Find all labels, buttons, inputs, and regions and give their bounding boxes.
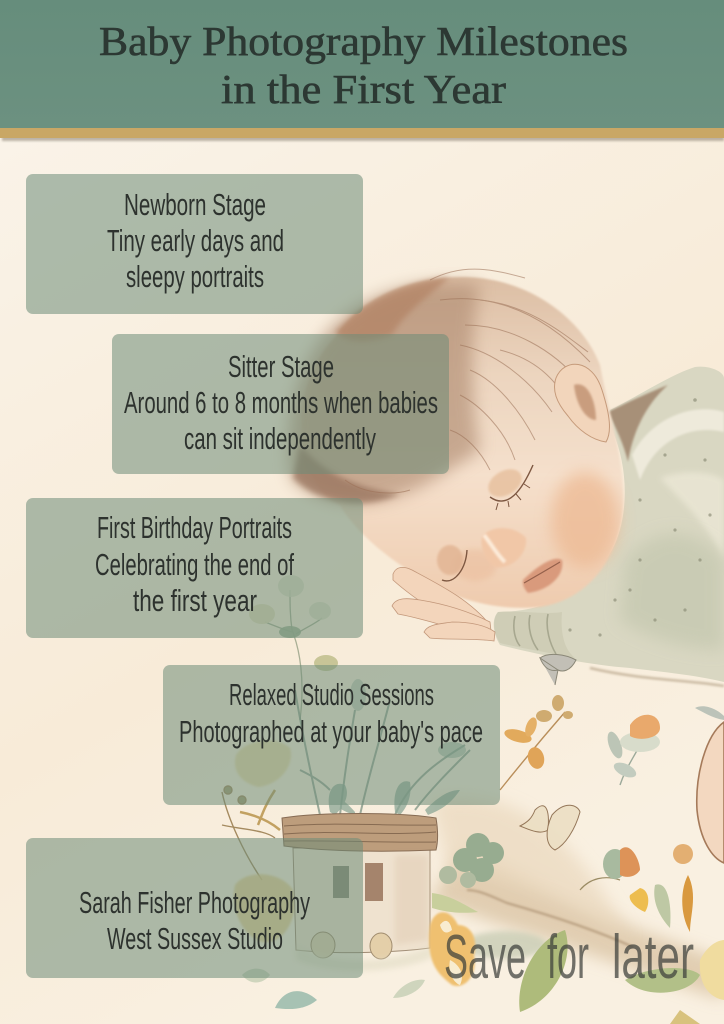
panel: newborn stage: Newborn Stage: [124, 187, 266, 222]
panel: studio name: Sarah Fisher Photography: [79, 885, 310, 920]
panel: relaxed studio sessions: Relaxed Studio Sessions: [229, 677, 434, 712]
plant leaves: [329, 679, 466, 815]
baby head: [289, 269, 623, 608]
eyes, nose and mouth: [437, 464, 562, 593]
left sprig: [222, 786, 280, 880]
panel: studio name: [26, 838, 363, 978]
yellow flower: [235, 741, 291, 787]
panel: sitter stage: Around 6 to 8 months when babies: [124, 385, 438, 420]
title: [99, 18, 628, 112]
blanket: [430, 796, 724, 1000]
panel: relaxed studio sessions: [163, 665, 500, 805]
flower sprays on blanket: [500, 654, 724, 932]
illustration: sleeping baby and nursery scene: [222, 269, 724, 1024]
panel: sitter stage: [112, 334, 449, 474]
hand: [392, 567, 495, 641]
clover flowers by panel: [249, 575, 338, 720]
lower left flower: [234, 874, 295, 942]
save for later call to action: Save: [444, 923, 526, 992]
title: in the First Year: [221, 66, 506, 112]
garment and sleeve: [494, 367, 724, 686]
panel: first birthday portraits: [26, 498, 363, 638]
panel: newborn stage: Tiny early days and: [107, 223, 284, 258]
panel: newborn stage: sleepy portraits: [126, 259, 264, 294]
green foliage beside pot: [432, 833, 504, 913]
foreground leaves and petals: [242, 930, 724, 1024]
panel: sitter stage: Sitter Stage: [228, 349, 334, 384]
header banner: [0, 0, 724, 141]
save for later call to action: for: [547, 923, 589, 992]
panel: first birthday portraits: Celebrating the end of: [95, 547, 294, 582]
banner fill: [0, 0, 724, 128]
panel: newborn stage: [26, 174, 363, 314]
panel: relaxed studio sessions: Photographed at your baby's pace: [179, 714, 483, 749]
panel: studio name: West Sussex Studio: [107, 921, 283, 956]
banner shadow: [2, 133, 724, 141]
panel: first birthday portraits: the first year: [133, 583, 257, 618]
title: Baby Photography Milestones: [99, 18, 628, 64]
ear: [554, 364, 609, 442]
large orange and yellow flower: [429, 912, 475, 986]
gold stripe: [0, 128, 724, 138]
panel: sitter stage: can sit independently: [184, 421, 376, 456]
pot: [282, 814, 438, 971]
plant stems in pot: [295, 690, 470, 815]
save for later call to action: [444, 923, 694, 992]
second baby foot at right edge: [697, 722, 724, 863]
panel: first birthday portraits: First Birthday Portraits: [97, 510, 292, 545]
hair: [289, 283, 480, 503]
